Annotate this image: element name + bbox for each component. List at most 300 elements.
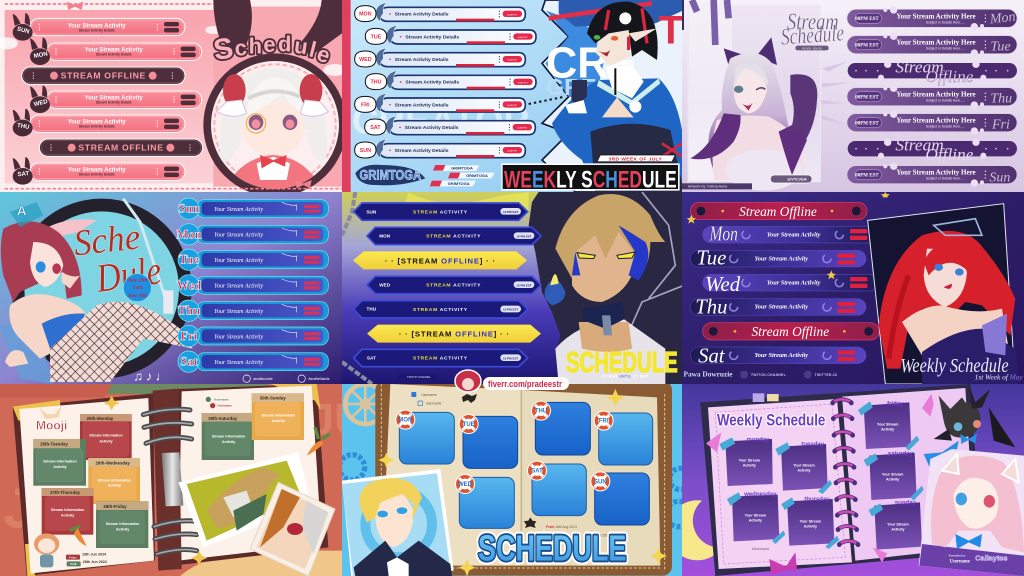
chain decoration bbox=[342, 192, 372, 384]
title: weekly schedule: WEEKLY SCHEDULE bbox=[504, 167, 677, 194]
row: Wednesday: Your Stream Activity bbox=[214, 284, 263, 290]
row: Tuesday: Your Stream Activity Here bbox=[896, 38, 976, 46]
title: weekly schedule: Weekly Schedule bbox=[717, 411, 825, 430]
card: Saturday: 29th-Saturday bbox=[208, 416, 238, 421]
username checkboxes bbox=[411, 392, 442, 406]
row: Wednesday: Wed bbox=[705, 274, 741, 296]
social labels: TWITTER-ID bbox=[815, 373, 837, 377]
date lines bbox=[524, 517, 624, 537]
row: Saturday bbox=[365, 116, 535, 135]
row: Wednesday bbox=[703, 274, 877, 296]
star icons bbox=[378, 389, 667, 576]
row: Monday: Mon bbox=[709, 224, 738, 246]
title: scheDule: Dule bbox=[92, 247, 164, 301]
card: Monday: Activity bbox=[743, 464, 757, 468]
title: schedule: SCHEDULE bbox=[478, 528, 626, 569]
dates: From: bbox=[69, 555, 77, 559]
title: Stream Schedule: Stream bbox=[787, 8, 839, 35]
row: Wednesday: Your Stream Activity bbox=[85, 96, 143, 102]
row: Wednesday: WED bbox=[379, 282, 391, 287]
row: Saturday: Stream Activity Details bbox=[405, 125, 459, 131]
panel: purple notebook bbox=[667, 384, 1024, 576]
panel: blue weekly schedule bbox=[342, 0, 713, 194]
row: Saturday: SAT bbox=[370, 125, 381, 131]
row: Monday: MON bbox=[33, 51, 48, 60]
row: Friday bbox=[847, 111, 1017, 135]
card: Sunday bbox=[252, 393, 304, 440]
row: stream offline 2 bbox=[703, 323, 879, 340]
card: Sunday bbox=[590, 471, 649, 525]
date badge bbox=[123, 274, 151, 302]
card: Wednesday: Your Stream bbox=[745, 513, 767, 517]
card: Sunday: Your Stream bbox=[887, 523, 909, 527]
row: Monday bbox=[355, 3, 525, 22]
card: Monday bbox=[719, 437, 773, 486]
row: Wednesday: WED bbox=[359, 57, 372, 63]
row: Thursday: Your Stream Activity bbox=[68, 120, 126, 126]
card: Wednesday: WED bbox=[458, 482, 473, 488]
blue ribbon bbox=[924, 441, 959, 469]
card: Tuesday bbox=[775, 442, 832, 494]
row: Friday: 10 AM PST bbox=[507, 104, 518, 107]
row: Tuesday: 00PM EST bbox=[855, 43, 879, 48]
card: Friday bbox=[858, 401, 919, 451]
dates bbox=[66, 553, 108, 566]
social handle bbox=[770, 175, 812, 183]
card: Sunday: Stream Information bbox=[262, 413, 295, 417]
row: Wednesday bbox=[367, 276, 541, 294]
title: schedule: XX MAY UNTIL XX MAY bbox=[602, 375, 649, 379]
row: Sunday: Sun bbox=[989, 170, 1010, 185]
character portrait: white haired girl in circle bbox=[203, 53, 347, 200]
card: Thursday: Activity bbox=[804, 524, 818, 528]
logo: Mooji: Mooji bbox=[36, 419, 67, 433]
row: Friday: FRI bbox=[361, 102, 370, 108]
row: Monday: Mon bbox=[176, 227, 202, 241]
logo: Grimtoga: GRIMTOGA bbox=[359, 166, 421, 182]
row: stream offline 1 bbox=[848, 62, 1018, 86]
card: Tuesday: tuesday bbox=[801, 442, 825, 448]
dates: 28th Jun 2024 bbox=[83, 560, 108, 564]
row: stream offline 1: Stream Offline bbox=[739, 204, 817, 219]
panel: nautical schedule bbox=[339, 381, 691, 576]
row: Thursday: STREAM ACTIVITY bbox=[413, 307, 468, 313]
card: Monday: monday bbox=[747, 437, 770, 443]
chibi fox bbox=[34, 533, 59, 567]
row: Sunday: Your Stream Activity bbox=[214, 207, 263, 213]
date badge: June 30th bbox=[127, 294, 147, 299]
social label bbox=[399, 374, 439, 379]
row: Thursday: Your Stream Activity bbox=[214, 309, 263, 315]
title: Schedule: h bbox=[249, 33, 262, 58]
row: Saturday: SAT bbox=[17, 171, 30, 178]
title: Stream Schedule bbox=[782, 14, 844, 45]
row: Thursday: 00PM EST bbox=[855, 95, 879, 100]
card: Wednesday: wednesday bbox=[743, 492, 777, 498]
open book bbox=[375, 381, 672, 576]
row: Monday: Mon bbox=[988, 10, 1016, 27]
card: Tuesday: Stream Information bbox=[43, 460, 77, 464]
row: Friday: Your Stream Activity bbox=[214, 334, 263, 340]
row: Saturday: Stream Activity Details bbox=[79, 173, 115, 177]
row: Thursday: Stream Activity Details bbox=[405, 80, 459, 86]
card: Tuesday: 25th-Tuesday bbox=[40, 442, 68, 447]
card: Wednesday bbox=[88, 458, 140, 504]
binder rings bbox=[830, 399, 860, 547]
vinyl record bbox=[12, 199, 192, 379]
card: Sunday: SUN bbox=[594, 479, 607, 485]
row: Friday: Fri bbox=[991, 118, 1010, 133]
portrait card: pink haired cat girl: Username bbox=[950, 559, 970, 564]
card: Sunday: Activity bbox=[891, 528, 906, 532]
portrait card: red haired queen bbox=[868, 204, 1019, 384]
row: Saturday: 10 AM PST bbox=[517, 127, 528, 130]
row: Monday bbox=[367, 227, 541, 245]
card: Thursday: Activity bbox=[61, 513, 75, 517]
row: Thursday: Your Stream Activity bbox=[755, 304, 808, 311]
row: Tuesday bbox=[178, 249, 328, 270]
row: Sunday bbox=[13, 13, 185, 41]
card: Saturday bbox=[202, 413, 254, 460]
username checkboxes: Username bbox=[426, 402, 442, 406]
row: stream offline 2: Stream Offline bbox=[752, 324, 829, 339]
row: Saturday: Your Stream Activity bbox=[755, 352, 808, 359]
row: Wednesday: Wed bbox=[177, 278, 201, 292]
row: Saturday: 12 PM EST bbox=[503, 356, 518, 360]
row: Monday bbox=[176, 224, 328, 245]
card: Thursday bbox=[42, 488, 93, 535]
social labels: TWITCH-CHANNEL bbox=[751, 373, 786, 377]
panel: planner orange green: JU bbox=[310, 396, 365, 444]
card: Saturday: SAT bbox=[531, 469, 543, 475]
row: Sunday bbox=[355, 139, 525, 158]
row: Wednesday: Your Stream Activity bbox=[767, 279, 821, 286]
social handles bbox=[243, 375, 330, 382]
row: Sunday: Your Stream Activity Here bbox=[896, 168, 976, 176]
carrot icons bbox=[70, 427, 330, 546]
zigzag panel: GRE bbox=[546, 74, 597, 100]
card: Friday: Activity bbox=[116, 528, 130, 532]
social labels bbox=[740, 371, 837, 379]
dark storm panel bbox=[529, 192, 684, 384]
portrait card: pink haired cat girl: Illustrated by bbox=[949, 554, 966, 558]
row: Monday: Stream Activity Details bbox=[96, 53, 132, 57]
card: Monday: Activity bbox=[99, 439, 114, 443]
logo: Pawa Dowruzie bbox=[683, 370, 733, 379]
background lettering: CREATOR bbox=[352, 100, 530, 141]
social tags: GRIMTOGA bbox=[466, 173, 488, 178]
character: chibi black cat bbox=[934, 384, 1015, 447]
row: Wednesday bbox=[30, 85, 202, 113]
card: Friday: 28th-Friday bbox=[103, 504, 127, 509]
card: Wednesday bbox=[455, 474, 514, 528]
row: Sunday: STREAM ACTIVITY bbox=[413, 209, 468, 215]
row: Thursday: Thu bbox=[990, 92, 1012, 107]
row: Wednesday bbox=[177, 275, 328, 296]
dates: Until: bbox=[70, 562, 77, 566]
row: Sunday bbox=[178, 198, 328, 219]
row: stream offline 1 bbox=[690, 202, 867, 220]
artwork card bbox=[682, 0, 820, 182]
dates: 19th Jun 2024 bbox=[82, 553, 107, 557]
row: Saturday: SAT bbox=[367, 355, 376, 360]
title: scheDule bbox=[72, 216, 164, 301]
row: Sunday: SUN bbox=[360, 148, 371, 154]
title: Schedule: u bbox=[293, 33, 309, 59]
card: Friday: Stream Information bbox=[106, 522, 139, 526]
card: Friday bbox=[96, 501, 148, 548]
card: Thursday: THU bbox=[535, 409, 547, 415]
panel: planner orange green bbox=[0, 384, 365, 576]
title: Stream Schedule: Schedule bbox=[780, 20, 845, 51]
card: Friday: Activity bbox=[881, 427, 895, 431]
card: Friday bbox=[594, 411, 653, 465]
panel: pink bunny schedule bbox=[0, 0, 347, 200]
panel: crimson weekly schedule bbox=[682, 192, 1024, 384]
username checkboxes: Username bbox=[421, 393, 437, 397]
card: Monday: MON bbox=[398, 418, 412, 424]
date label: XX.XX - XX.XX bbox=[802, 46, 822, 50]
card: Sunday bbox=[869, 501, 922, 550]
card: Monday: Stream Information bbox=[89, 434, 123, 438]
row: Monday: Your Stream Activity bbox=[767, 232, 821, 239]
row: Tuesday: Tue bbox=[696, 248, 726, 270]
row: Thursday: 10 AM PST bbox=[518, 81, 528, 84]
row: Saturday: Sat bbox=[698, 346, 726, 368]
title: Schedule: e bbox=[263, 32, 276, 57]
credit: Artwork by: Felicia Aena bbox=[688, 185, 728, 189]
logo: Grimtoga bbox=[355, 165, 425, 185]
card: Thursday bbox=[781, 497, 839, 549]
card: Tuesday bbox=[459, 414, 518, 468]
card: Monday: 25th-Monday bbox=[87, 416, 114, 421]
row: Tuesday: Your Stream Activity bbox=[755, 256, 808, 263]
row: Tuesday bbox=[365, 25, 536, 44]
star icons bbox=[104, 396, 207, 565]
title: scheDule: Sche bbox=[72, 216, 142, 263]
card: Tuesday bbox=[33, 439, 86, 486]
row: Sunday: SUN bbox=[366, 209, 377, 214]
fiverr badge: fiverr.com/pradeestr bbox=[488, 379, 562, 389]
title: Schedule bbox=[212, 34, 330, 64]
ribbon bows bbox=[67, 2, 312, 188]
date badge: Until bbox=[132, 286, 143, 291]
character: horned boy in blue jacket bbox=[552, 2, 684, 192]
row: Saturday: Sat bbox=[180, 355, 199, 369]
title: schedule: SCHEDULE bbox=[566, 347, 678, 379]
card: Wednesday: Activity bbox=[108, 484, 122, 488]
row: Tuesday: Tue bbox=[990, 40, 1011, 55]
row: Friday: Fri bbox=[181, 329, 198, 343]
card: Tuesday: Activity bbox=[797, 469, 812, 473]
title: Schedule: e bbox=[314, 41, 334, 68]
row: stream offline 1 bbox=[22, 67, 185, 84]
row: Saturday: Your Stream Activity bbox=[68, 168, 126, 174]
row: Wednesday: STREAM ACTIVITY bbox=[426, 283, 481, 289]
card: Monday bbox=[395, 410, 454, 464]
row: Sunday: Stream Activity Details bbox=[395, 148, 449, 154]
panel: lavender stream schedule bbox=[682, 0, 1024, 192]
row: Saturday bbox=[690, 346, 866, 368]
row: Tuesday bbox=[690, 248, 866, 270]
row: Sunday: Subject or Details Here..... bbox=[926, 177, 965, 181]
card: Saturday bbox=[527, 461, 586, 516]
row: Thursday: Subject or Details Here..... bbox=[926, 99, 965, 103]
row: Thursday: Your Stream Activity Here bbox=[896, 90, 976, 98]
row: Tuesday: Subject or Details Here..... bbox=[926, 47, 965, 51]
social handles: aerafiloxoxile bbox=[253, 377, 273, 381]
bunny ears bbox=[213, 0, 342, 57]
row: Saturday bbox=[13, 157, 185, 185]
row: Friday: Stream Activity Details bbox=[395, 102, 449, 108]
row: stream offline 1: · · [STREAM OFFLINE] · · bbox=[385, 256, 496, 265]
row: Monday: Your Stream Activity Here bbox=[896, 12, 976, 20]
usernames bbox=[206, 397, 232, 408]
row: Saturday: STREAM ACTIVITY bbox=[413, 356, 468, 362]
date lines: From 16th Aug 2024 bbox=[546, 525, 577, 529]
date lines: Until 25th Aug 2024 bbox=[594, 533, 624, 537]
character: bunny girl with red hair bbox=[0, 202, 193, 384]
card: Saturday: Stream Information bbox=[212, 434, 245, 438]
portrait card: pink haired cat girl bbox=[919, 449, 1024, 576]
row: Thursday bbox=[690, 296, 866, 318]
crescent moon bbox=[667, 500, 722, 560]
social tags: GRIMTOGA bbox=[448, 181, 470, 186]
logo: Mooji bbox=[36, 406, 67, 433]
row: Tuesday: Your Stream Activity bbox=[214, 258, 263, 264]
zigzag panel bbox=[540, 0, 682, 192]
social tags: GRIMTOGA bbox=[451, 166, 473, 171]
row: Sunday: SUN bbox=[16, 27, 30, 35]
row: stream offline 2: Offline bbox=[925, 145, 974, 164]
card: Thursday bbox=[531, 401, 590, 455]
planner book bbox=[13, 384, 328, 576]
card: Tuesday: Your Stream bbox=[793, 463, 815, 467]
usernames: Username bbox=[214, 398, 229, 402]
card: Wednesday: 26th-Wednesday bbox=[96, 461, 130, 466]
row: Saturday: Your Stream Activity bbox=[214, 360, 263, 366]
tag: week label: 3RD WEEK OF JULY bbox=[609, 156, 662, 162]
character: blond boy with collar bbox=[544, 194, 665, 384]
card: Sunday: 30th-Sunday bbox=[260, 395, 286, 400]
row: Thursday: Stream Activity Details bbox=[79, 125, 115, 129]
row: Friday bbox=[355, 93, 525, 112]
row: Sunday: 12 PM EST bbox=[503, 210, 518, 214]
notebook bbox=[700, 384, 982, 576]
panel: planner orange green: J U bbox=[3, 477, 92, 540]
card: Saturday bbox=[864, 451, 924, 501]
card: Thursday: thursday bbox=[804, 497, 830, 503]
row: Wednesday: Stream Activity Details bbox=[96, 101, 132, 105]
row: Tuesday: TUE bbox=[371, 34, 382, 40]
panel: electric schedule bbox=[342, 192, 684, 384]
side stripe bbox=[342, 0, 351, 192]
row: Sunday bbox=[354, 203, 528, 220]
row: Wednesday: 10 AM PST bbox=[507, 59, 518, 62]
ship wheel bbox=[345, 384, 385, 424]
row: Sunday: Stream Activity Details bbox=[79, 28, 115, 32]
card: Thursday: Your Stream bbox=[800, 519, 822, 523]
row: Tuesday: Tue bbox=[179, 253, 199, 267]
card: Wednesday bbox=[727, 492, 785, 544]
card: Wednesday: Activity bbox=[749, 518, 763, 522]
row: Thursday bbox=[13, 109, 185, 136]
row: Monday: 12 PM EST bbox=[516, 234, 532, 238]
social tags bbox=[429, 165, 495, 186]
panel: vinyl scheDule bbox=[0, 192, 342, 384]
row: stream offline 1: STREAM OFFLINE bbox=[61, 70, 146, 80]
portrait card: pink haired cat girl: Callaytes bbox=[975, 554, 1007, 563]
card: Monday: Your Stream bbox=[739, 458, 761, 462]
card: Saturday: Activity bbox=[222, 440, 236, 444]
row: stream offline 2: · · [STREAM OFFLINE] · · bbox=[399, 330, 510, 339]
row: Thursday: THU bbox=[367, 307, 377, 312]
card: Thursday: Stream Information bbox=[51, 508, 84, 512]
row: Thursday: 12 PM EST bbox=[503, 308, 518, 312]
row: Saturday bbox=[178, 351, 328, 372]
character: purple fox girl bbox=[690, 37, 849, 191]
card: Friday: FRI bbox=[599, 419, 609, 425]
card: Friday: friday bbox=[887, 401, 904, 407]
row: Monday: Your Stream Activity bbox=[214, 233, 263, 239]
row: stream offline 1: Offline bbox=[925, 67, 974, 86]
fiverr badge bbox=[455, 370, 569, 403]
title: Schedule: S bbox=[211, 32, 235, 67]
row: stream offline 2 bbox=[367, 325, 541, 343]
row: Thursday: Thu bbox=[695, 296, 727, 318]
row: Friday bbox=[178, 325, 328, 347]
music notes: ♫ ♪ ♩ bbox=[133, 370, 168, 384]
title: Schedule: l bbox=[307, 37, 319, 62]
title: Schedule: c bbox=[233, 35, 248, 61]
social label: TWITCH CHANNEL bbox=[407, 375, 431, 379]
row: Thursday bbox=[178, 300, 328, 321]
row: Wednesday: WED bbox=[33, 99, 49, 108]
crystal and bow icons bbox=[706, 394, 934, 575]
star decorations bbox=[687, 192, 890, 279]
character: bunny girl with red hair: A bbox=[17, 202, 27, 218]
title: schedule: SCHEDULE bbox=[478, 528, 626, 569]
row: Thursday bbox=[365, 71, 536, 90]
row: Sunday: Sun bbox=[178, 202, 200, 216]
photo: smiling girl stamp bbox=[250, 482, 335, 576]
row: Sunday: 10 AM PST bbox=[507, 150, 518, 153]
social handle: @VYLVEA bbox=[787, 177, 807, 182]
row: Monday: MON bbox=[359, 12, 372, 18]
row: stream offline 1 bbox=[353, 251, 527, 269]
row: Monday: Stream Activity Details bbox=[395, 12, 449, 18]
title: weekly schedule: 1st Week of May bbox=[975, 372, 1023, 381]
card: Tuesday: Activity bbox=[53, 465, 68, 469]
card: Friday: Your Stream bbox=[877, 422, 899, 426]
row: Monday: STREAM ACTIVITY bbox=[426, 234, 481, 240]
row: Thursday bbox=[846, 88, 1018, 108]
row: Tuesday bbox=[846, 33, 1018, 54]
row: Thursday: Thu bbox=[178, 304, 200, 318]
card: Monday bbox=[80, 414, 132, 460]
credit bbox=[682, 183, 752, 189]
row: Friday: 00PM EST bbox=[855, 121, 879, 126]
row: Friday: Subject or Details Here..... bbox=[926, 125, 965, 129]
row: Monday: 10 AM PST bbox=[507, 13, 518, 16]
binder rings bbox=[143, 409, 197, 554]
card: Tuesday: TUE bbox=[463, 422, 475, 428]
row: Wednesday: 12 PM EST bbox=[516, 283, 532, 287]
row: stream offline 2: Stream bbox=[895, 136, 944, 155]
row: Thursday: THU bbox=[371, 80, 382, 86]
row: Wednesday bbox=[355, 48, 525, 67]
zigzag panel: TO bbox=[659, 8, 713, 52]
